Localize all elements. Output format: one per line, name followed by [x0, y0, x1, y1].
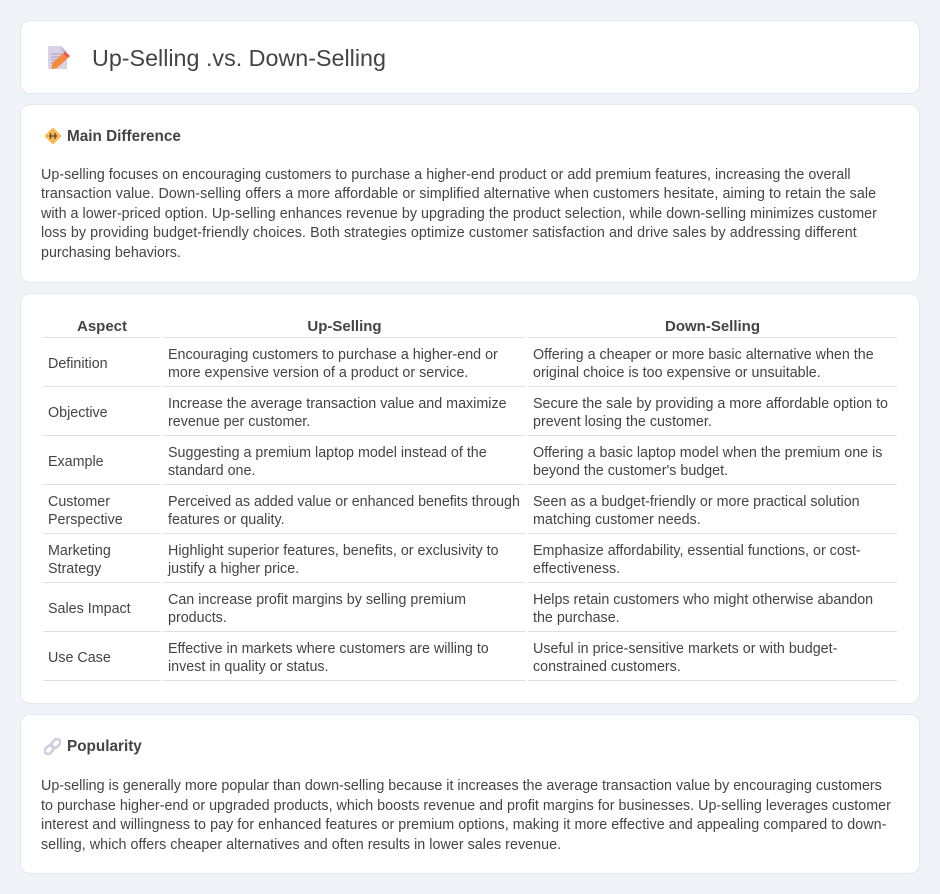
text: Emphasize affordability, essential functions, or cost- [533, 543, 861, 559]
text: Example [48, 454, 104, 470]
text: invest in quality or status. [168, 659, 329, 675]
panel: popularity [20, 714, 920, 874]
text: Use Case [48, 650, 111, 666]
text: Up-selling focuses on encouraging customers to purchase a higher-end product or add premium features, increasing the overall [41, 167, 851, 183]
text: original choice is too expensive or unsuitable. [533, 365, 821, 381]
text: selling, which offers cheaper alternatives and often results in lower sales revenue. [41, 837, 561, 853]
panel: main difference [20, 104, 920, 283]
text: Increase the average transaction value and maximize [168, 396, 507, 412]
row: customer perspective [48, 494, 860, 528]
text: Up-selling is generally more popular than down-selling because it increases the average transaction value by encouraging customers [41, 778, 882, 794]
row: marketing strategy [48, 543, 861, 577]
text: Marketing [48, 543, 111, 559]
title: Up-Selling .vs. Down-Selling [92, 45, 386, 71]
icon: chain link [44, 738, 61, 755]
text: Useful in price-sensitive markets or with budget- [533, 641, 837, 657]
panel: comparison table [20, 293, 920, 704]
text: to purchase higher-end or upgraded products, which boosts revenue and profit margins for businesses. Up-selling leverages customer [41, 798, 891, 814]
text: interest and willingness to pay for enhanced features or premium options, making it more effective and appealing compared to down- [41, 817, 886, 833]
text: Perceived as added value or enhanced benefits through [168, 494, 520, 510]
text: beyond the customer's budget. [533, 463, 728, 479]
text: Offering a basic laptop model when the premium one is [533, 445, 882, 461]
text: more expensive version of a product or service. [168, 365, 468, 381]
text: products. [168, 610, 227, 626]
text: Secure the sale by providing a more affordable option to [533, 396, 888, 412]
text: prevent losing the customer. [533, 414, 712, 430]
row: objective [48, 396, 888, 430]
text: Sales Impact [48, 601, 131, 617]
text: constrained customers. [533, 659, 681, 675]
text: Strategy [48, 561, 101, 577]
text block: popularity [41, 778, 891, 853]
text: effectiveness. [533, 561, 620, 577]
text: features or quality. [168, 512, 285, 528]
text: transaction value. Down-selling offers a more affordable or simplified alternative when customers hesitate, aiming to retain the sale [41, 186, 876, 202]
text: matching customer needs. [533, 512, 701, 528]
text: standard one. [168, 463, 255, 479]
table header: down-selling: Down-Selling [665, 318, 760, 335]
icon: warning diamond [44, 128, 62, 144]
text: Can increase profit margins by selling premium [168, 592, 466, 608]
text: loss by providing budget-friendly choices. Both strategies optimize customer satisfaction and drive sales by addressing different [41, 225, 857, 241]
row: definition [48, 347, 874, 381]
text: Definition [48, 356, 108, 372]
text: purchasing behaviors. [41, 245, 181, 261]
text block: main difference [41, 167, 877, 261]
row: use case [48, 641, 837, 675]
text: Encouraging customers to purchase a higher-end or [168, 347, 498, 363]
text: justify a higher price. [168, 561, 299, 577]
text: Objective [48, 405, 108, 421]
text: Perspective [48, 512, 123, 528]
heading: popularity: Popularity [67, 738, 142, 755]
text: Suggesting a premium laptop model instead of the [168, 445, 487, 461]
icon: document with pencil [48, 46, 70, 69]
text: Effective in markets where customers are willing to [168, 641, 489, 657]
text: Highlight superior features, benefits, or exclusivity to [168, 543, 499, 559]
text: the purchase. [533, 610, 620, 626]
text: Helps retain customers who might otherwise abandon [533, 592, 873, 608]
text: with a lower-priced option. Up-selling enhances revenue by upgrading the product selection, while down-selling minimizes customer [41, 206, 877, 222]
table header: aspect: Aspect [77, 318, 127, 335]
text: revenue per customer. [168, 414, 310, 430]
text: Offering a cheaper or more basic alternative when the [533, 347, 874, 363]
text: Seen as a budget-friendly or more practical solution [533, 494, 860, 510]
row: example [48, 445, 882, 479]
row: sales impact [48, 592, 873, 626]
panel: title header [20, 20, 920, 94]
text: Customer [48, 494, 110, 510]
table header: up-selling: Up-Selling [307, 318, 382, 335]
heading: main difference: Main Difference [67, 128, 181, 145]
